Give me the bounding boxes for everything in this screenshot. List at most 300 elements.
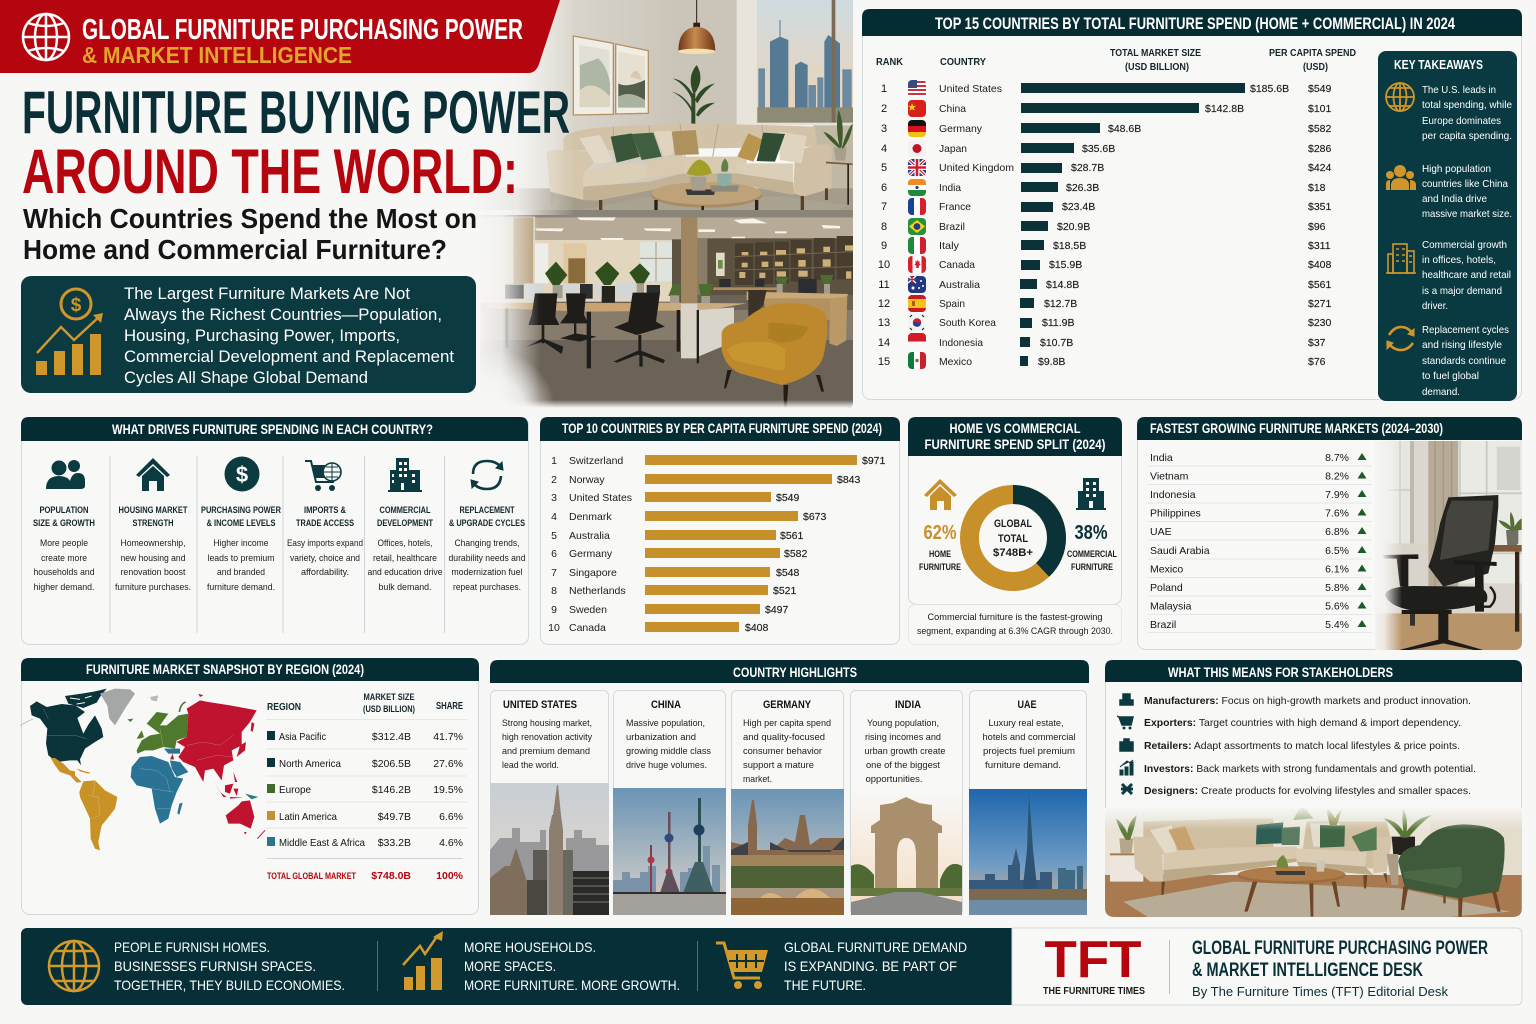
- home share: [919, 522, 961, 572]
- bar chart: total market size: $18.5B: [1053, 240, 1086, 252]
- region rows: 6.6%: [439, 811, 463, 823]
- banner subtitle: & MARKET INTELLIGENCE: [82, 42, 352, 68]
- rank numbers and countries: Spain: [939, 298, 965, 310]
- per capita spend column: $96: [1308, 221, 1326, 233]
- growth table: 5.6%: [1325, 600, 1349, 612]
- driver: commercial development: [368, 458, 442, 593]
- bar chart: total market size: $48.6B: [1108, 123, 1141, 135]
- driver: imports: [287, 461, 363, 578]
- rank numbers and countries: 3: [881, 123, 887, 135]
- rank numbers and countries: Australia: [939, 279, 980, 291]
- icon: globe logo: [23, 14, 69, 60]
- ranks and countries: 8: [551, 585, 557, 597]
- rank numbers and countries: 9: [881, 240, 887, 252]
- donut chart: TOTAL: [998, 533, 1028, 545]
- bar chart: total market size: $9.8B: [1038, 356, 1065, 368]
- stakeholder: exporters: Exporters: Target countries with high demand & import dependency.: [1144, 717, 1461, 729]
- takeaway text 2: countries like China: [1422, 178, 1508, 190]
- table column headings: COUNTRY: [940, 56, 986, 68]
- icon: dollar growth chart: $: [71, 295, 82, 316]
- driver: purchasing power: Higher income: [214, 538, 268, 549]
- rank numbers and countries: 15: [878, 356, 890, 368]
- footer message 3: THE FUTURE.: [784, 977, 866, 993]
- rank numbers and countries: 7: [881, 201, 887, 213]
- bar chart: per capita: $843: [837, 474, 861, 486]
- subtitle: [23, 203, 477, 265]
- stakeholder: manufacturers: Manufacturers: Focus on high-growth markets and product innovation.: [1144, 695, 1471, 707]
- commercial share: 38%: [1074, 522, 1108, 544]
- header banner: [0, 0, 560, 73]
- photo: India Gate: [851, 790, 962, 915]
- icon: globe: [49, 941, 99, 991]
- footer message 1: TOGETHER, THEY BUILD ECONOMIES.: [114, 977, 345, 993]
- ranks and countries: Singapore: [569, 567, 617, 579]
- growth table: 7.9%: [1325, 489, 1349, 501]
- commercial share: [1067, 522, 1117, 572]
- takeaway text 1: [1422, 84, 1512, 142]
- panel: country highlights: [490, 660, 1089, 915]
- bar chart: per capita: [645, 455, 886, 634]
- card: Germany: [731, 690, 844, 915]
- panel heading: FURNITURE SPEND SPLIT (2024): [924, 436, 1106, 452]
- driver: housing: STRENGTH: [132, 518, 174, 529]
- driver: commercial development: DEVELOPMENT: [377, 518, 433, 529]
- photo: German town: [731, 789, 844, 915]
- panel heading: [21, 417, 528, 441]
- growth table: 6.5%: [1325, 545, 1349, 557]
- icon: house: [136, 458, 170, 491]
- ranks and countries: 5: [551, 530, 557, 542]
- footer message 2: [464, 939, 680, 993]
- footer message 1: PEOPLE FURNISH HOMES.: [114, 939, 270, 955]
- driver: housing: Homeownership,: [120, 538, 186, 549]
- ranks and countries: 1: [551, 455, 557, 467]
- icon: growth chart: [403, 931, 443, 990]
- region total row: $748.0B: [371, 870, 411, 882]
- ranks and countries: Germany: [569, 548, 613, 560]
- panel: home vs commercial split: [908, 417, 1122, 644]
- donut chart: [970, 494, 1056, 582]
- driver: commercial development: Offices, hotels,: [378, 538, 432, 549]
- driver: imports: IMPORTS &: [304, 505, 346, 516]
- takeaway text 4: [1422, 324, 1509, 398]
- commercial share: FURNITURE: [1071, 562, 1113, 572]
- logo: TFT: TFT: [1044, 931, 1142, 989]
- table column headings: TOTAL MARKET SIZE: [1110, 47, 1201, 59]
- driver: replacement: repeat purchases.: [453, 582, 521, 593]
- panel heading: TOP 10 COUNTRIES BY PER CAPITA FURNITURE SPEND (2024): [562, 420, 882, 436]
- panel heading: [540, 417, 900, 441]
- card: United States: and premium demand: [502, 746, 590, 757]
- rank numbers and countries: China: [939, 103, 966, 115]
- rank numbers and countries: United States: [939, 83, 1002, 95]
- takeaway text 3: is a major demand: [1422, 285, 1502, 297]
- commercial share: COMMERCIAL: [1067, 549, 1117, 559]
- icon: buildings: [388, 458, 422, 492]
- growth table: Malaysia: [1150, 600, 1192, 612]
- rank numbers and countries: Mexico: [939, 356, 972, 368]
- ranks and countries: Australia: [569, 530, 610, 542]
- photo: New York skyline: [490, 783, 609, 915]
- callout text: Housing, Purchasing Power, Imports,: [124, 326, 400, 345]
- rank numbers and countries: Canada: [939, 259, 975, 271]
- main title: FURNITURE BUYING POWER: [22, 79, 570, 146]
- bar chart: total market size: $35.6B: [1082, 143, 1115, 155]
- driver: replacement: [448, 461, 526, 593]
- panel heading: FASTEST GROWING FURNITURE MARKETS (2024–2030): [1150, 420, 1443, 436]
- callout text: Always the Richest Countries—Population,: [124, 305, 442, 324]
- callout text: Cycles All Shape Global Demand: [124, 368, 368, 387]
- driver: purchasing power: PURCHASING POWER: [201, 505, 281, 516]
- panel: stakeholders: [1105, 660, 1522, 918]
- panel: top 10 per capita: [540, 417, 900, 644]
- home share: HOME: [929, 549, 951, 559]
- stakeholder: designers: Designers: Create products for evolving lifestyles and smaller spaces.: [1144, 785, 1471, 797]
- driver: imports: TRADE ACCESS: [296, 518, 354, 529]
- card: United States: high renovation activity: [502, 732, 592, 743]
- driver: purchasing power: & INCOME LEVELS: [206, 518, 276, 529]
- rank numbers and countries: 12: [878, 298, 890, 310]
- branding text: & MARKET INTELLIGENCE DESK: [1192, 960, 1423, 981]
- per capita spend column: $230: [1308, 317, 1332, 329]
- growth table: 8.2%: [1325, 470, 1349, 482]
- bar chart: per capita: $561: [780, 530, 804, 542]
- donut chart: GLOBAL: [994, 518, 1032, 530]
- growth table: Mexico: [1150, 564, 1183, 576]
- callout text: Commercial Development and Replacement: [124, 347, 454, 366]
- rank numbers and countries: 13: [878, 317, 890, 329]
- table column headings: (USD BILLION): [1125, 61, 1189, 73]
- card: Germany: market.: [743, 774, 772, 785]
- growth table: Saudi Arabia: [1150, 545, 1210, 557]
- takeaway text 2: High population: [1422, 163, 1491, 175]
- photo: Dubai skyline: [969, 789, 1087, 915]
- panel: what drives furniture spending: [21, 417, 528, 644]
- takeaway text 3: driver.: [1422, 300, 1448, 312]
- rank numbers and countries: France: [939, 201, 971, 213]
- table column headings: [876, 47, 1356, 73]
- growth table: India: [1150, 452, 1173, 464]
- driver: population: higher demand.: [34, 582, 94, 593]
- bar chart: per capita: $497: [765, 604, 789, 616]
- rank numbers and countries: 6: [881, 182, 887, 194]
- card: Germany: High per capita spend: [743, 718, 831, 729]
- panel heading: [908, 417, 1122, 456]
- driver: purchasing power: [201, 456, 281, 593]
- region rows: Europe: [279, 784, 311, 796]
- card: United States: lead the world.: [502, 760, 559, 771]
- table column headings: RANK: [876, 56, 903, 68]
- takeaway text 3: healthcare and retail: [1422, 269, 1511, 281]
- driver: population: [33, 460, 95, 593]
- ranks and countries: Denmark: [569, 511, 612, 523]
- takeaway text 3: [1422, 239, 1511, 312]
- rank numbers and countries: Japan: [939, 143, 967, 155]
- region total row: 100%: [436, 870, 464, 882]
- footer message 3: IS EXPANDING. BE PART OF: [784, 958, 957, 974]
- region table headings: SHARE: [436, 701, 463, 712]
- icon: cart with globe: [305, 461, 341, 491]
- takeaway text 2: and India drive: [1422, 193, 1487, 205]
- bar chart: total market size: $185.6B: [1250, 83, 1289, 95]
- ranks and countries: 10: [548, 622, 560, 634]
- takeaway text 1: total spending, while: [1422, 99, 1512, 111]
- region total row: [267, 870, 464, 882]
- footer: call to action band: [21, 928, 1522, 1005]
- growth table: 6.1%: [1325, 564, 1349, 576]
- card: UAE: projects fuel premium: [983, 746, 1075, 757]
- bar chart: total market size: $10.7B: [1040, 337, 1073, 349]
- main title: AROUND THE WORLD:: [22, 137, 518, 207]
- home share: FURNITURE: [919, 562, 961, 572]
- card: UAE: UAE: [1018, 699, 1036, 711]
- bar chart: per capita: $549: [776, 492, 800, 504]
- footer message 3: GLOBAL FURNITURE DEMAND: [784, 939, 967, 955]
- rank numbers and countries: India: [939, 182, 961, 194]
- ranks and countries: 4: [551, 511, 557, 523]
- takeaway text 1: per capita spending.: [1422, 130, 1512, 142]
- bar chart: per capita: $673: [803, 511, 827, 523]
- driver: replacement: & UPGRADE CYCLES: [449, 518, 525, 529]
- card: Germany: GERMANY: [763, 699, 812, 711]
- card: Germany: consumer behavior: [743, 746, 822, 757]
- region rows: 19.5%: [433, 784, 463, 796]
- donut chart: $748B+: [993, 547, 1033, 559]
- photo: living room: [1105, 805, 1522, 918]
- office scene: [480, 210, 857, 410]
- card: India: rising incomes and: [865, 732, 941, 743]
- per capita spend column: $271: [1308, 298, 1332, 310]
- per capita spend column: $18: [1308, 182, 1326, 194]
- ranks and countries: 7: [551, 567, 557, 579]
- driver: imports: variety, choice and: [290, 553, 360, 564]
- bar chart: per capita: $408: [745, 622, 769, 634]
- icon: manufacturers: [1120, 694, 1133, 705]
- card: UAE: [969, 690, 1087, 915]
- split note: segment, expanding at 6.3% CAGR through 2030.: [917, 626, 1113, 636]
- rank numbers and countries: Indonesia: [939, 337, 983, 349]
- world map: [20, 689, 265, 850]
- footer message 2: MORE SPACES.: [464, 958, 556, 974]
- country flags: [908, 80, 926, 369]
- callout text: The Largest Furniture Markets Are Not: [124, 284, 410, 303]
- rank numbers and countries: United Kingdom: [939, 162, 1014, 174]
- bar chart: total market size: $142.8B: [1205, 103, 1244, 115]
- driver: housing: [115, 458, 191, 593]
- driver: population: households and: [34, 567, 94, 578]
- icon: dollar growth chart: [36, 289, 103, 375]
- rank numbers and countries: Italy: [939, 240, 960, 252]
- per capita spend column: $351: [1308, 201, 1332, 213]
- subtitle: Which Countries Spend the Most on: [23, 203, 477, 234]
- card: India: Young population,: [867, 718, 939, 729]
- region rows: Asia Pacific: [279, 731, 326, 743]
- ranks and countries: United States: [569, 492, 632, 504]
- panel: key takeaways: KEY TAKEAWAYS: [1394, 57, 1483, 72]
- panel: key takeaways: [1378, 51, 1517, 401]
- driver: housing: furniture purchases.: [115, 582, 191, 593]
- rank numbers and countries: 2: [881, 103, 887, 115]
- per capita spend column: $561: [1308, 279, 1332, 291]
- growth table: [1150, 452, 1349, 631]
- rank numbers and countries: Germany: [939, 123, 983, 135]
- region table headings: [267, 692, 463, 714]
- growth table: 5.4%: [1325, 619, 1349, 631]
- driver: population: SIZE & GROWTH: [33, 518, 95, 529]
- driver: imports: Easy imports expand: [287, 538, 363, 549]
- ranks and countries: 2: [551, 474, 557, 486]
- bar chart: total market size: $23.4B: [1062, 201, 1095, 213]
- region rows: 27.6%: [433, 758, 463, 770]
- branding text: By The Furniture Times (TFT) Editorial Desk: [1192, 985, 1449, 999]
- banner title: GLOBAL FURNITURE PURCHASING POWER: [82, 14, 523, 46]
- ranks and countries: Canada: [569, 622, 606, 634]
- subtitle: Home and Commercial Furniture?: [23, 234, 447, 265]
- driver: commercial development: retail, healthcare: [373, 553, 437, 564]
- icon: buildings: [1386, 244, 1416, 273]
- per capita spend column: $101: [1308, 103, 1332, 115]
- driver: housing: renovation boost: [120, 567, 186, 578]
- panel: top 15 countries: [862, 9, 1522, 401]
- region rows: $33.2B: [378, 837, 411, 849]
- growth table: 8.7%: [1325, 452, 1349, 464]
- ranks and countries: 3: [551, 492, 557, 504]
- panel heading: FURNITURE MARKET SNAPSHOT BY REGION (2024): [86, 661, 364, 677]
- region rows: $206.5B: [372, 758, 411, 770]
- bar chart: total market size: $12.7B: [1044, 298, 1077, 310]
- driver: commercial development: bulk demand.: [378, 582, 432, 593]
- driver: imports: affordability.: [301, 567, 349, 578]
- driver: population: create more: [41, 553, 87, 564]
- card: UAE: furniture demand.: [985, 760, 1061, 771]
- panel heading: [490, 660, 1089, 683]
- footer message 2: MORE HOUSEHOLDS.: [464, 939, 596, 955]
- card: India: [850, 690, 962, 915]
- per capita spend column: $311: [1308, 240, 1331, 252]
- panel heading: WHAT THIS MEANS FOR STAKEHOLDERS: [1168, 664, 1393, 680]
- bar chart: per capita: $521: [773, 585, 797, 597]
- region rows: [267, 731, 463, 849]
- icon: exporters cart: [1117, 716, 1133, 730]
- footer message 1: BUSINESSES FURNISH SPACES.: [114, 958, 316, 974]
- bar chart: total market size: $28.7B: [1071, 162, 1104, 174]
- icon: shopping cart: [716, 943, 768, 989]
- driver: housing: HOUSING MARKET: [118, 505, 188, 516]
- driver: purchasing power: and branded: [217, 567, 265, 578]
- card: China: [613, 690, 726, 915]
- icon: investors chart: [1120, 760, 1133, 775]
- rank numbers and countries: South Korea: [939, 317, 996, 329]
- photo: Shanghai skyline: [613, 788, 726, 915]
- takeaway text 1: The U.S. leads in: [1422, 84, 1496, 96]
- growth table: Poland: [1150, 582, 1183, 594]
- growth table: Brazil: [1150, 619, 1176, 631]
- region total row: TOTAL GLOBAL MARKET: [267, 871, 356, 882]
- panel: region snapshot: [20, 658, 479, 914]
- icon: commercial building: [1076, 478, 1106, 510]
- per capita spend column: $424: [1308, 162, 1332, 174]
- panel heading: [21, 658, 479, 681]
- card: United States: [490, 690, 609, 915]
- takeaway text 4: demand.: [1422, 386, 1460, 398]
- card: United States: UNITED STATES: [503, 699, 577, 711]
- region rows: Latin America: [279, 811, 337, 823]
- ranks and countries: Netherlands: [569, 585, 626, 597]
- panel heading: HOME VS COMMERCIAL: [950, 420, 1081, 436]
- takeaway text 3: Commercial growth: [1422, 239, 1507, 251]
- takeaway text 2: massive market size.: [1422, 208, 1512, 220]
- region table headings: REGION: [267, 701, 301, 713]
- panel heading: [1105, 660, 1522, 682]
- per capita spend column: $549: [1308, 83, 1332, 95]
- region rows: 41.7%: [433, 731, 463, 743]
- growth table: 5.8%: [1325, 582, 1349, 594]
- panel heading: [1137, 417, 1522, 440]
- icon: cycle arrows: [471, 461, 503, 489]
- stakeholder: retailers: Retailers: Adapt assortments to match local lifestyles & price points.: [1144, 740, 1460, 752]
- per capita spend column: $408: [1308, 259, 1332, 271]
- footer message 1: [114, 939, 345, 993]
- driver: replacement: REPLACEMENT: [460, 505, 515, 516]
- driver: population: More people: [40, 538, 88, 549]
- takeaway text 4: to fuel global: [1422, 370, 1479, 382]
- bar chart: total market size: $11.9B: [1042, 317, 1074, 329]
- panel: fastest growing markets: [1137, 417, 1523, 653]
- panel heading: [862, 9, 1522, 36]
- takeaway text 4: Replacement cycles: [1422, 324, 1509, 336]
- region rows: 4.6%: [439, 837, 463, 849]
- bar chart: total market size: $15.9B: [1049, 259, 1082, 271]
- takeaway text 3: in offices, hotels,: [1422, 254, 1496, 266]
- photo: office chair: [1370, 440, 1523, 653]
- icon: designers tools: [1121, 784, 1133, 794]
- driver: replacement: Changing trends,: [454, 538, 520, 549]
- bar chart: total market size: $20.9B: [1057, 221, 1090, 233]
- icon: retailers bag: [1120, 739, 1133, 751]
- bar chart: per capita: $582: [784, 548, 808, 560]
- driver: purchasing power: furniture demand.: [207, 582, 275, 593]
- icon: people: [46, 460, 85, 489]
- ranks and countries: Sweden: [569, 604, 607, 616]
- rank numbers and countries: 5: [881, 162, 887, 174]
- card: India: urban growth create: [864, 746, 946, 757]
- driver: commercial development: COMMERCIAL: [380, 505, 431, 516]
- driver: replacement: modernization fuel: [452, 567, 522, 578]
- icon: dollar coin: $: [236, 462, 248, 487]
- rank numbers and countries: 1: [881, 83, 887, 95]
- panel heading: COUNTRY HIGHLIGHTS: [733, 664, 857, 680]
- living room scene: [494, 0, 853, 210]
- hero photo: living room and office interiors: [481, 0, 853, 408]
- callout text: [124, 284, 454, 387]
- takeaway text 4: and rising lifestyle: [1422, 339, 1502, 351]
- card: UAE: Luxury real estate,: [988, 718, 1064, 729]
- card: Germany: and quality-focused: [743, 732, 825, 743]
- icon: replacement cycle: [1387, 327, 1414, 350]
- per capita spend column: $582: [1308, 123, 1332, 135]
- rank numbers and countries: Brazil: [939, 221, 965, 233]
- card: China: growing middle class: [626, 746, 711, 757]
- split note: [908, 604, 1122, 644]
- icon: globe: [1386, 83, 1414, 111]
- home share: 62%: [924, 522, 957, 544]
- ranks and countries: [548, 455, 632, 634]
- rank numbers and countries: [878, 83, 1014, 368]
- main title: [22, 79, 570, 207]
- card: India: INDIA: [895, 699, 921, 711]
- region rows: $312.4B: [372, 731, 411, 743]
- region table headings: MARKET SIZE: [364, 692, 414, 702]
